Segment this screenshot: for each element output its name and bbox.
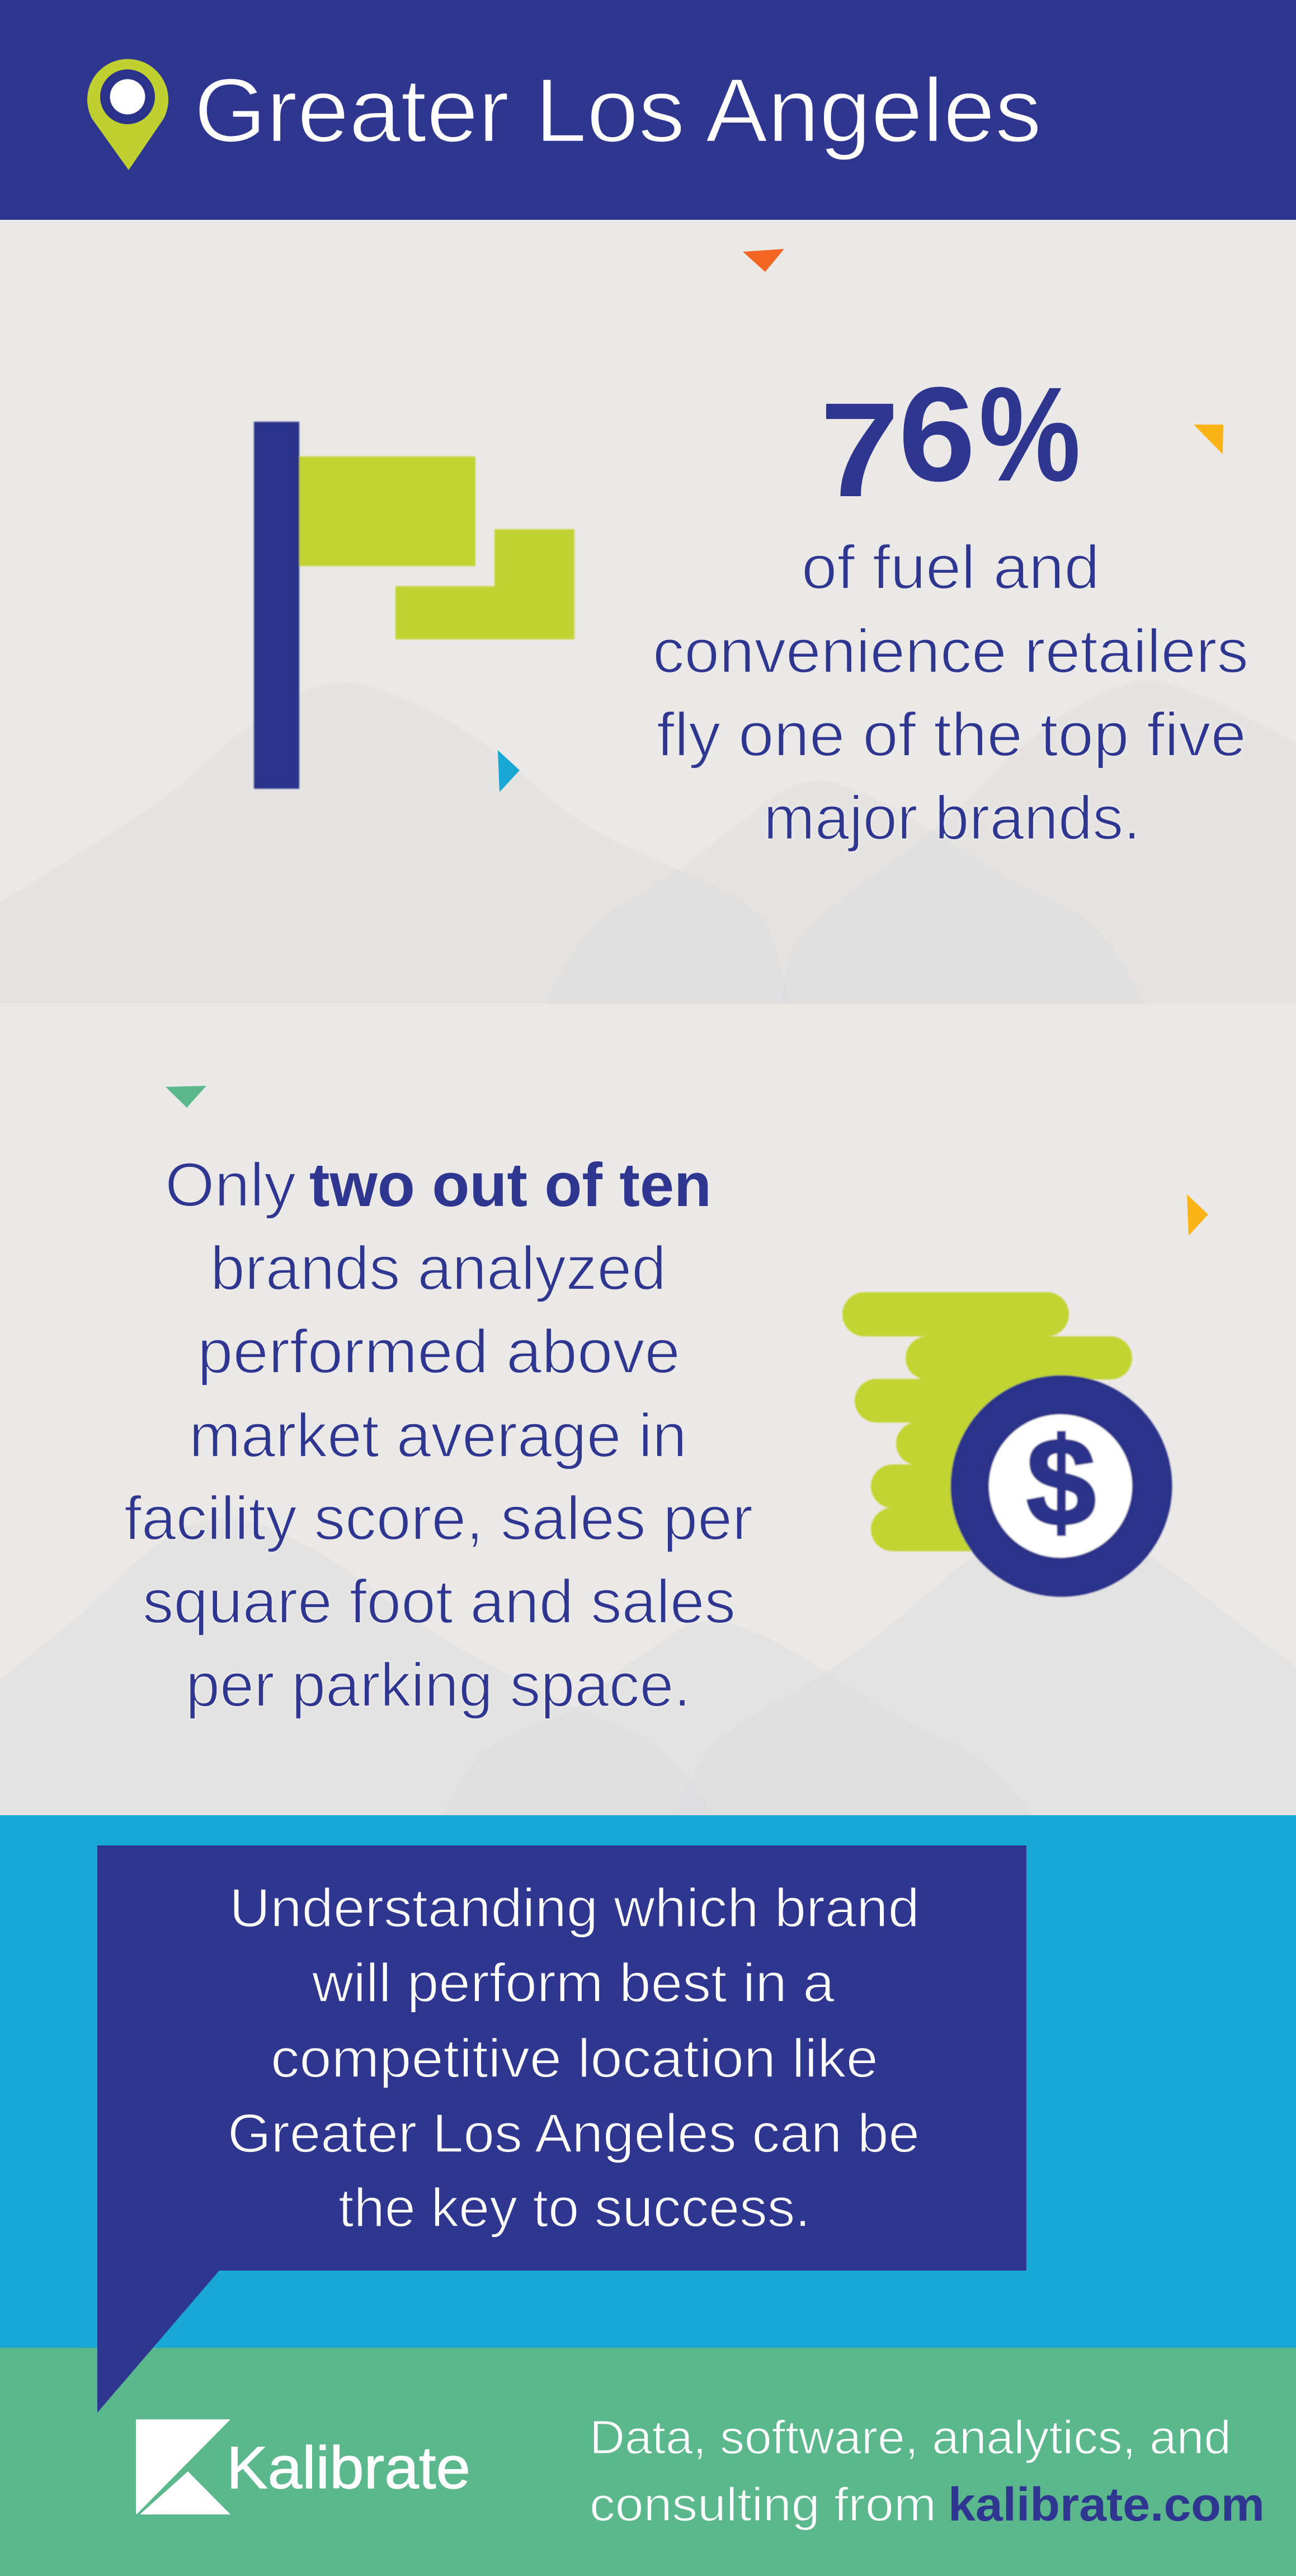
background mountains bbox=[0, 1514, 1296, 1815]
text block: callout message: competitive location like bbox=[271, 2028, 878, 2089]
text block: callout message bbox=[228, 1877, 920, 2238]
text block: performance statistic description: market average in bbox=[189, 1401, 687, 1470]
text block: performance statistic description: brands analyzed bbox=[210, 1234, 666, 1303]
text block: performance statistic description: two out of ten bbox=[309, 1151, 711, 1219]
text block: performance statistic description bbox=[124, 1151, 753, 1720]
text block: performance statistic description: facility score, sales per bbox=[124, 1484, 753, 1553]
statistic: 76%: 7 bbox=[820, 375, 899, 525]
text block: footer tagline: consulting from bbox=[590, 2478, 936, 2531]
panel: header bbox=[0, 0, 1296, 220]
text block: performance statistic description: square foot and sales bbox=[143, 1567, 736, 1636]
icon: yellow triangle bbox=[1187, 1194, 1208, 1236]
text block: callout message: the key to success. bbox=[338, 2177, 810, 2238]
text block: footer tagline: Data, software, analytics, and bbox=[590, 2411, 1231, 2464]
panel: performance statistic bbox=[0, 1086, 1296, 1815]
text block: footer tagline bbox=[590, 2411, 1265, 2531]
icon: coins with dollar bbox=[842, 1292, 1172, 1597]
panel: footer band bbox=[0, 2348, 1296, 2576]
text block: brand statistic description bbox=[653, 533, 1248, 853]
icon: orange triangle bbox=[743, 249, 784, 272]
text block: brand statistic description: fly one of the top five bbox=[657, 700, 1246, 769]
icon: green triangle bbox=[166, 1086, 206, 1108]
icon: coins with dollar: $ bbox=[1026, 1411, 1096, 1552]
background mountains bbox=[0, 681, 1296, 1004]
icon: yellow triangle bbox=[1194, 425, 1223, 454]
icon: blue triangle bbox=[498, 750, 520, 792]
logo wordmark: Kalibrate bbox=[227, 2434, 470, 2501]
statistic: 76%: % bbox=[979, 359, 1081, 509]
text block: brand statistic description: convenience retailers bbox=[653, 617, 1248, 686]
text block: performance statistic description: performed above bbox=[197, 1317, 680, 1386]
text block: callout message: will perform best in a bbox=[312, 1952, 835, 2013]
statistic: 76%: 6 bbox=[898, 359, 975, 509]
text block: brand statistic description: of fuel and bbox=[802, 533, 1100, 602]
icon: flag bbox=[254, 422, 574, 789]
panel: blue band bbox=[0, 1815, 1296, 2348]
text block: callout message: Greater Los Angeles can be bbox=[228, 2103, 920, 2164]
icon: location pin bbox=[87, 59, 168, 170]
title: Greater Los Angeles bbox=[194, 60, 1041, 161]
text block: brand statistic description: major brands. bbox=[764, 784, 1141, 853]
icon: K mark bbox=[136, 2419, 230, 2514]
text block: performance statistic description: per parking space. bbox=[186, 1651, 691, 1720]
logo: Kalibrate bbox=[136, 2419, 470, 2514]
text block: footer tagline: kalibrate.com bbox=[948, 2478, 1265, 2531]
callout: speech bubble bbox=[97, 1845, 1026, 2413]
text block: callout message: Understanding which brand bbox=[229, 1877, 920, 1938]
panel: brand statistic bbox=[0, 249, 1296, 1004]
text block: performance statistic description: Only bbox=[165, 1151, 296, 1219]
